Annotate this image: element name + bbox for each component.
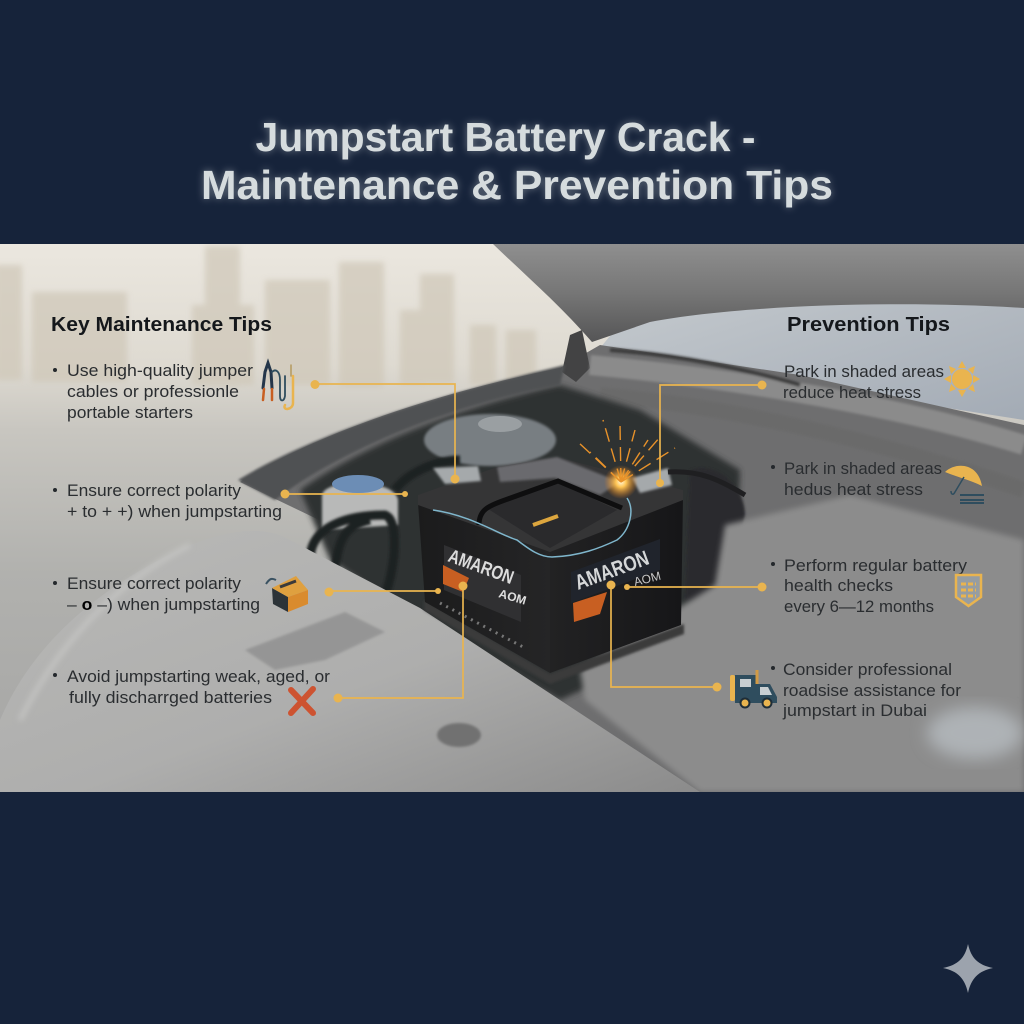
engine cover dome <box>424 414 556 466</box>
windshield <box>602 304 1024 420</box>
terminals <box>433 466 481 484</box>
right air intake <box>685 468 745 610</box>
tip: roadside assistance <box>771 660 961 720</box>
lid <box>485 483 617 548</box>
reservoir with blue cap <box>322 483 398 530</box>
hood vent recess <box>245 612 385 670</box>
connector lines <box>280 380 766 702</box>
tip: roadside assistance: Consider professional <box>783 660 952 679</box>
tip: health checks: every 6—12 months <box>784 597 934 616</box>
left face <box>418 503 550 673</box>
tip: avoid weak batteries <box>53 667 330 707</box>
tip: quality cables: cables or professionle <box>67 382 239 401</box>
tip: park in shade: reduce heat stress <box>783 383 921 402</box>
crack glow line <box>433 498 631 557</box>
icon: umbrella <box>945 466 984 503</box>
left orange tag <box>443 565 469 592</box>
icon: sparkle watermark <box>943 944 993 993</box>
tip: avoid weak batteries: fully discharrged batteries <box>69 688 272 707</box>
lower hood <box>0 531 700 792</box>
tip: park in shade: Park in shaded areas <box>784 362 944 381</box>
tip: polarity negative <box>53 574 260 614</box>
heading: key maintenance tips: Key Maintenance Tips <box>51 313 272 336</box>
wiper and cowl bands <box>588 346 1024 454</box>
right face <box>550 497 683 673</box>
tip: quality cables <box>53 361 253 422</box>
rear reflective section <box>497 457 620 495</box>
title <box>201 114 833 208</box>
tip: polarity negative: Ensure correct polarity <box>67 574 241 593</box>
handle <box>479 481 622 525</box>
battery <box>418 457 745 684</box>
icon: sun <box>944 361 980 397</box>
city skyline <box>0 246 536 390</box>
right fuse box cover <box>580 495 1024 792</box>
tip: quality cables: Use high-quality jumper <box>67 361 253 380</box>
tip: polarity positive <box>53 481 282 521</box>
raised hood <box>493 244 1024 342</box>
dark bay interior <box>300 385 740 700</box>
hoses <box>310 460 460 595</box>
left label panel <box>444 545 521 622</box>
title: Maintenance & Prevention Tips <box>201 162 833 208</box>
panel: prevention tips <box>730 313 984 720</box>
terminal cable <box>668 472 745 495</box>
tip: polarity positive: + to + +) when jumpstarting <box>67 502 282 521</box>
left brand: AMARON <box>445 546 516 589</box>
tip: quality cables: portable starters <box>67 403 193 422</box>
tip: park in shade <box>783 362 944 402</box>
tip: avoid weak batteries: Avoid jumpstarting weak, aged, or <box>67 667 330 686</box>
title: Jumpstart Battery Crack - <box>256 114 756 160</box>
panel: key maintenance tips <box>51 313 330 713</box>
tip: health checks: health checks <box>784 576 893 595</box>
engine bay backing <box>240 345 1024 792</box>
right orange tag <box>573 592 607 622</box>
spark burst <box>578 420 675 499</box>
washer hole <box>437 723 481 747</box>
icon: shield calendar <box>956 575 981 606</box>
shadow <box>424 600 684 684</box>
tip: polarity positive: Ensure correct polarity <box>67 481 241 500</box>
top face <box>418 457 683 552</box>
tip: roadside assistance: roadsise assistance for <box>783 681 961 700</box>
right label panel <box>571 539 660 603</box>
icon: service truck <box>730 670 777 708</box>
right brand: AMARON <box>572 547 652 595</box>
photo panel: car engine bay with city backdrop <box>0 244 1024 792</box>
fender wedge <box>238 365 565 500</box>
tip: health checks <box>771 556 968 616</box>
left ribs <box>440 603 525 648</box>
hood strut <box>562 330 590 382</box>
tip: polarity negative: – o –) when jumpstarting <box>67 595 260 614</box>
tip: roadside assistance: jumpstart in Dubai <box>782 701 927 720</box>
tip: park in shade two: Park in shaded areas <box>784 459 942 478</box>
heading: prevention tips: Prevention Tips <box>787 313 950 336</box>
tip: park in shade two: hedus heat stress <box>784 480 923 499</box>
tip: park in shade two <box>771 459 942 499</box>
icon: battery charger <box>266 576 308 612</box>
right AOM: AOM <box>632 569 662 589</box>
left AOM: AOM <box>497 586 528 608</box>
icon: red cross <box>291 689 313 713</box>
tip: health checks: Perform regular battery <box>784 556 968 575</box>
icon: jumper cables <box>263 363 293 409</box>
